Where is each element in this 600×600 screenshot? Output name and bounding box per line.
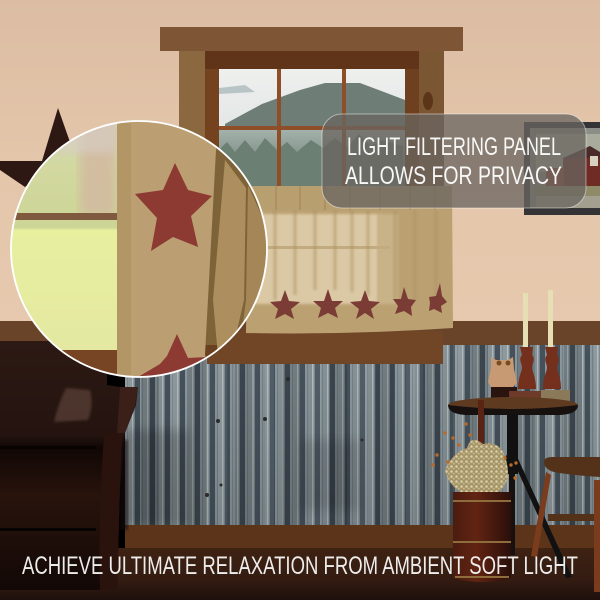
leather sofa	[0, 341, 138, 590]
curtain stars	[270, 283, 447, 319]
window sill	[207, 331, 443, 364]
zoom circle detail	[12, 122, 266, 376]
framed picture	[524, 122, 600, 215]
wall	[0, 0, 600, 330]
wall star decoration	[0, 108, 70, 187]
window view	[219, 69, 405, 190]
corrugated metal wall	[120, 345, 600, 526]
wood chair rail	[0, 321, 600, 345]
window frame	[160, 27, 463, 333]
zoomed star	[135, 163, 212, 251]
floor	[0, 548, 600, 600]
baseboard	[125, 525, 600, 550]
bucket with dried flowers	[431, 422, 518, 582]
candles and candle holders	[518, 290, 561, 389]
stool	[531, 457, 600, 592]
zoom circle outline	[11, 121, 267, 377]
zoomed lower star	[138, 334, 207, 377]
callout panel	[322, 114, 586, 208]
curtain	[246, 186, 453, 333]
table with owl and book	[448, 357, 578, 578]
